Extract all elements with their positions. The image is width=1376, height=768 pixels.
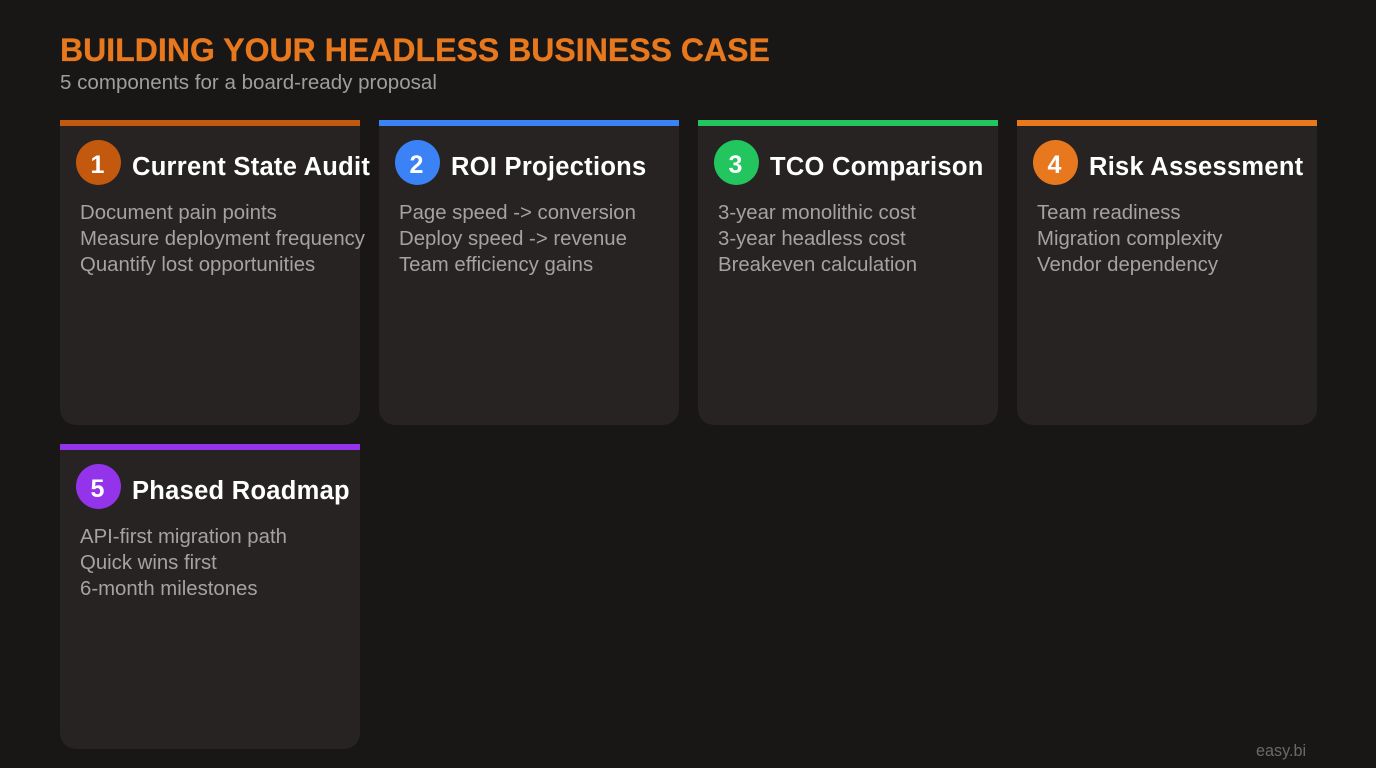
icon: number 3: 3 <box>729 151 742 179</box>
icon: number 5: 5 <box>91 475 104 503</box>
text: tco items: Breakeven calculation <box>718 254 917 276</box>
icon: number 1: 1 <box>91 151 104 179</box>
icon: number 3 <box>714 140 759 185</box>
footer brand: easy.bi <box>1256 742 1306 760</box>
text: risk items: Migration complexity <box>1037 228 1222 250</box>
icon: number 4: 4 <box>1048 151 1061 179</box>
title: BUILDING YOUR HEADLESS BUSINESS CASE <box>60 32 770 68</box>
subtitle: 5 components for a board-ready proposal <box>60 71 437 94</box>
panel: tco comparison <box>698 120 998 425</box>
heading: phased roadmap: Phased Roadmap <box>132 477 350 505</box>
text: tco items: 3-year monolithic cost <box>718 202 916 224</box>
text: roadmap items: API-first migration path <box>80 526 287 548</box>
panel: risk assessment <box>1017 120 1317 425</box>
text: tco items: 3-year headless cost <box>718 228 906 250</box>
icon: number 1 <box>76 140 121 185</box>
icon: number 5 <box>76 464 121 509</box>
icon: number 2 <box>395 140 440 185</box>
text: tco items <box>718 202 917 276</box>
text: roadmap items: Quick wins first <box>80 552 217 574</box>
text: risk items: Team readiness <box>1037 202 1181 224</box>
icon: number 2: 2 <box>410 151 423 179</box>
heading: current state audit: Current State Audit <box>132 153 370 181</box>
heading: roi projections: ROI Projections <box>451 153 646 181</box>
panel: phased roadmap <box>60 444 360 749</box>
icon: number 4 <box>1033 140 1078 185</box>
text: audit items: Quantify lost opportunities <box>80 254 315 276</box>
text: roi items: Page speed -> conversion <box>399 202 636 224</box>
text: roi items: Deploy speed -> revenue <box>399 228 627 250</box>
text: risk items <box>1037 202 1222 276</box>
panel: roi projections <box>379 120 679 425</box>
panel: current state audit <box>60 120 360 425</box>
text: roi items: Team efficiency gains <box>399 254 593 276</box>
text: roi items <box>399 202 636 276</box>
text: audit items <box>80 202 365 276</box>
text: roadmap items <box>80 526 287 600</box>
heading: tco comparison: TCO Comparison <box>770 153 984 181</box>
heading: risk assessment: Risk Assessment <box>1089 153 1303 181</box>
text: roadmap items: 6-month milestones <box>80 578 258 600</box>
text: audit items: Document pain points <box>80 202 277 224</box>
text: risk items: Vendor dependency <box>1037 254 1218 276</box>
text: audit items: Measure deployment frequency <box>80 228 365 250</box>
